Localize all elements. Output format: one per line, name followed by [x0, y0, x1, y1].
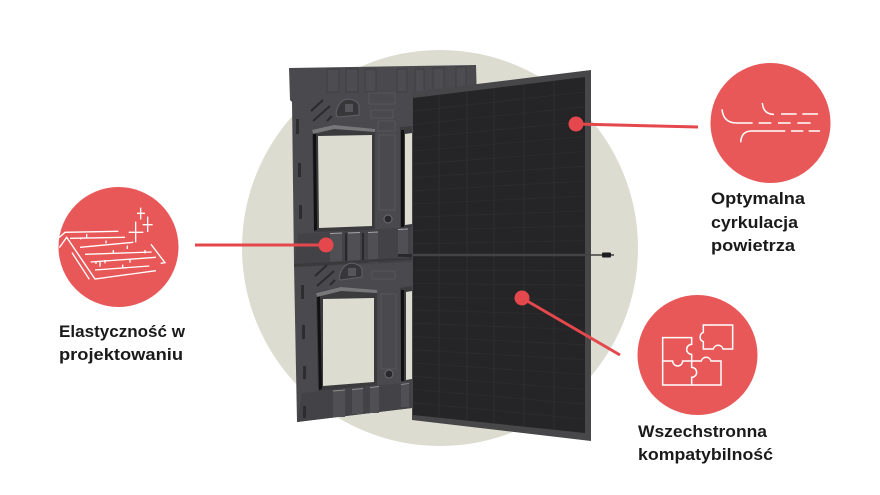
cell grid: [413, 92, 585, 419]
lower plate second window: [400, 286, 412, 382]
label: air circulation: cyrkulacja: [711, 213, 799, 232]
panel midline: [412, 254, 591, 256]
solar panel: [412, 70, 614, 441]
label: design flexibility: projektowaniu: [59, 345, 183, 364]
side slots: [296, 119, 306, 418]
callout line: compatibility: [514, 290, 620, 355]
upper plate second window: [400, 126, 412, 228]
icon: airflow: [710, 63, 830, 183]
icon: roof: [58, 187, 178, 307]
lower plate window: [316, 287, 377, 391]
cell columns: [439, 81, 554, 430]
label: design flexibility: [59, 322, 186, 364]
mounting plate: [289, 65, 477, 422]
lower plate seam: [294, 257, 412, 267]
lower plate band: [297, 382, 412, 422]
upper plate bolt: [384, 215, 392, 223]
label: design flexibility: Elastyczność w: [59, 322, 186, 341]
panel cells: [413, 77, 585, 433]
panel frame: [412, 70, 591, 441]
upper plate label: [369, 93, 395, 210]
upper plate vents: [311, 100, 332, 121]
lower plate label: [372, 271, 396, 369]
upper plate band: [294, 227, 412, 267]
label: compatibility: Wszechstronna: [638, 422, 768, 441]
panel cable: [591, 252, 614, 258]
plate body: [289, 65, 477, 422]
label: compatibility: [638, 422, 773, 464]
icon: puzzle: [638, 295, 758, 415]
lower plate bolt: [385, 370, 393, 378]
label: air circulation: Optymalna: [711, 189, 806, 208]
callout line: design flexibility: [195, 238, 334, 252]
upper plate latch: [336, 99, 359, 117]
label: air circulation: powietrza: [711, 236, 796, 255]
label: compatibility: kompatybilność: [638, 445, 773, 464]
lower plate latch: [339, 263, 362, 280]
upper plate window: [312, 126, 375, 232]
label: air circulation: [711, 189, 806, 255]
background circle: [242, 50, 638, 446]
upper plate mount tabs: [327, 67, 466, 93]
lower plate vents: [315, 265, 335, 286]
callout line: air circulation: [568, 116, 698, 132]
